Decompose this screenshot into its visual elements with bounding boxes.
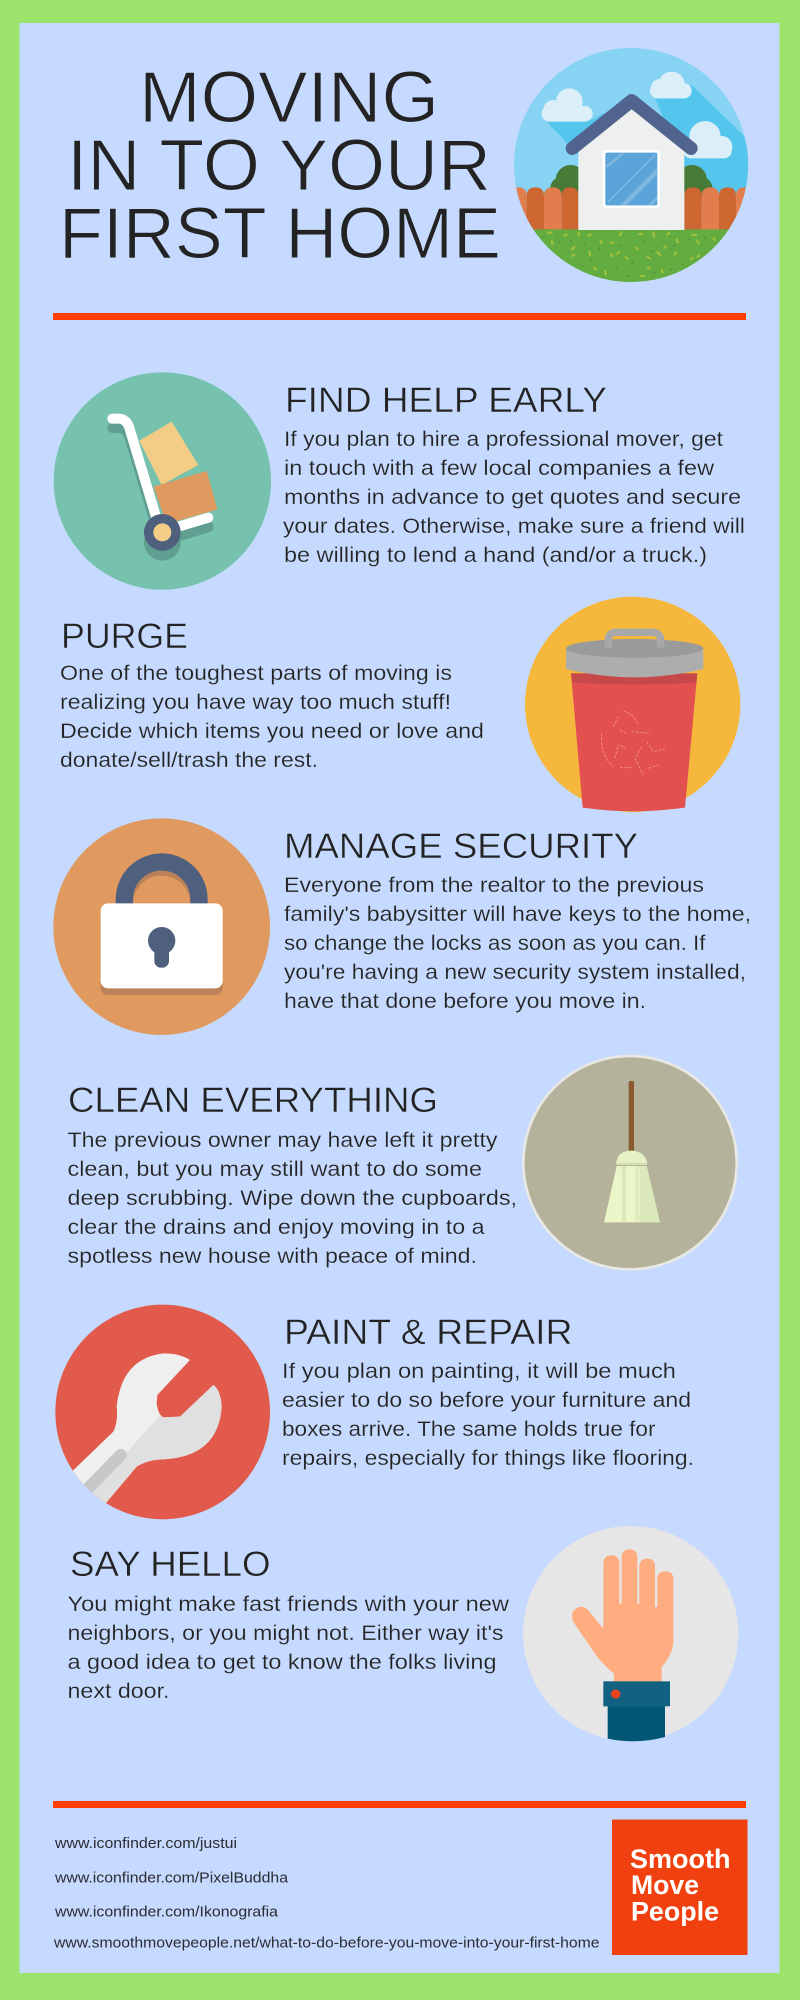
body text [60,662,484,772]
credits links: www.iconfinder.com/Ikonografia [54,1904,279,1920]
logo: Smooth Move People: Move [631,1870,699,1900]
icon: raised hand [523,1526,738,1741]
icon: trash can [525,597,740,812]
body text [282,1360,694,1470]
body text: easier to do so before your furniture and [282,1389,691,1412]
credits links [53,1836,599,1952]
icon: house in circle [510,48,753,286]
icon: hand truck with boxes [54,372,271,590]
credits links: www.smoothmovepeople.net/what-to-do-before-you-move-into-your-first-home [53,1936,599,1952]
icon: padlock [53,818,270,1035]
heading: PURGE [61,617,188,656]
body text: Decide which items you need or love and [60,720,484,743]
body text: next door. [68,1680,170,1703]
logo: Smooth Move People: Smooth [630,1844,730,1874]
body text: The previous owner may have left it pretty [68,1129,498,1152]
icon: wrench [55,1305,270,1519]
credits links: www.iconfinder.com/justui [54,1836,237,1852]
title: FIRST HOME [59,194,501,274]
section: paint and repair [55,1305,694,1519]
body text: clear the drains and enjoy moving in to a [68,1216,485,1239]
body text: realizing you have way too much stuff! [60,691,451,714]
body text [68,1129,517,1268]
section: clean everything [68,1056,737,1269]
body text: so change the locks as soon as you can. If [284,932,706,955]
credits links: www.iconfinder.com/PixelBuddha [54,1870,289,1886]
logo: Smooth Move People [612,1820,748,1955]
body text: in touch with a few local companies a few [284,457,715,480]
title: MOVING [139,58,439,138]
divider: bottom red line [53,1801,746,1808]
body text: your dates. Otherwise, make sure a friend will [283,515,745,538]
section: purge [60,597,740,812]
body text: clean, but you may still want to do some [68,1158,482,1181]
body text: months in advance to get quotes and secure [284,486,741,509]
title [59,58,501,274]
body text: family's babysitter will have keys to the home, [284,903,751,926]
body text [283,428,745,567]
icon: broom [523,1056,737,1269]
heading: SAY HELLO [70,1545,270,1584]
logo: Smooth Move People: People [631,1896,719,1926]
body text: repairs, especially for things like flooring. [282,1447,694,1470]
heading: MANAGE SECURITY [284,827,638,866]
body text [68,1593,510,1703]
body text: If you plan on painting, it will be much [282,1360,676,1383]
body text: If you plan to hire a professional mover, get [284,428,723,451]
heading: PAINT & REPAIR [284,1313,572,1352]
body text: a good idea to get to know the folks living [68,1651,497,1674]
body text: Everyone from the realtor to the previous [284,874,704,897]
body text: you're having a new security system installed, [284,961,746,984]
body text: boxes arrive. The same holds true for [282,1418,656,1441]
body text: spotless new house with peace of mind. [68,1245,477,1268]
title: IN TO YOUR [67,126,491,206]
divider: top red line [53,313,746,320]
body text: One of the toughest parts of moving is [60,662,452,685]
body text: neighbors, or you might not. Either way it's [68,1622,504,1645]
section: manage security [53,818,751,1035]
section: say hello [68,1526,738,1741]
heading: CLEAN EVERYTHING [68,1081,438,1120]
body text: deep scrubbing. Wipe down the cupboards, [68,1187,517,1210]
body text: be willing to lend a hand (and/or a truck.) [284,544,707,567]
body text: You might make fast friends with your new [68,1593,510,1616]
body text: have that done before you move in. [284,990,646,1013]
heading: FIND HELP EARLY [285,381,607,420]
body text: donate/sell/trash the rest. [60,749,318,772]
section: find help early [54,372,745,590]
body text [284,874,751,1013]
